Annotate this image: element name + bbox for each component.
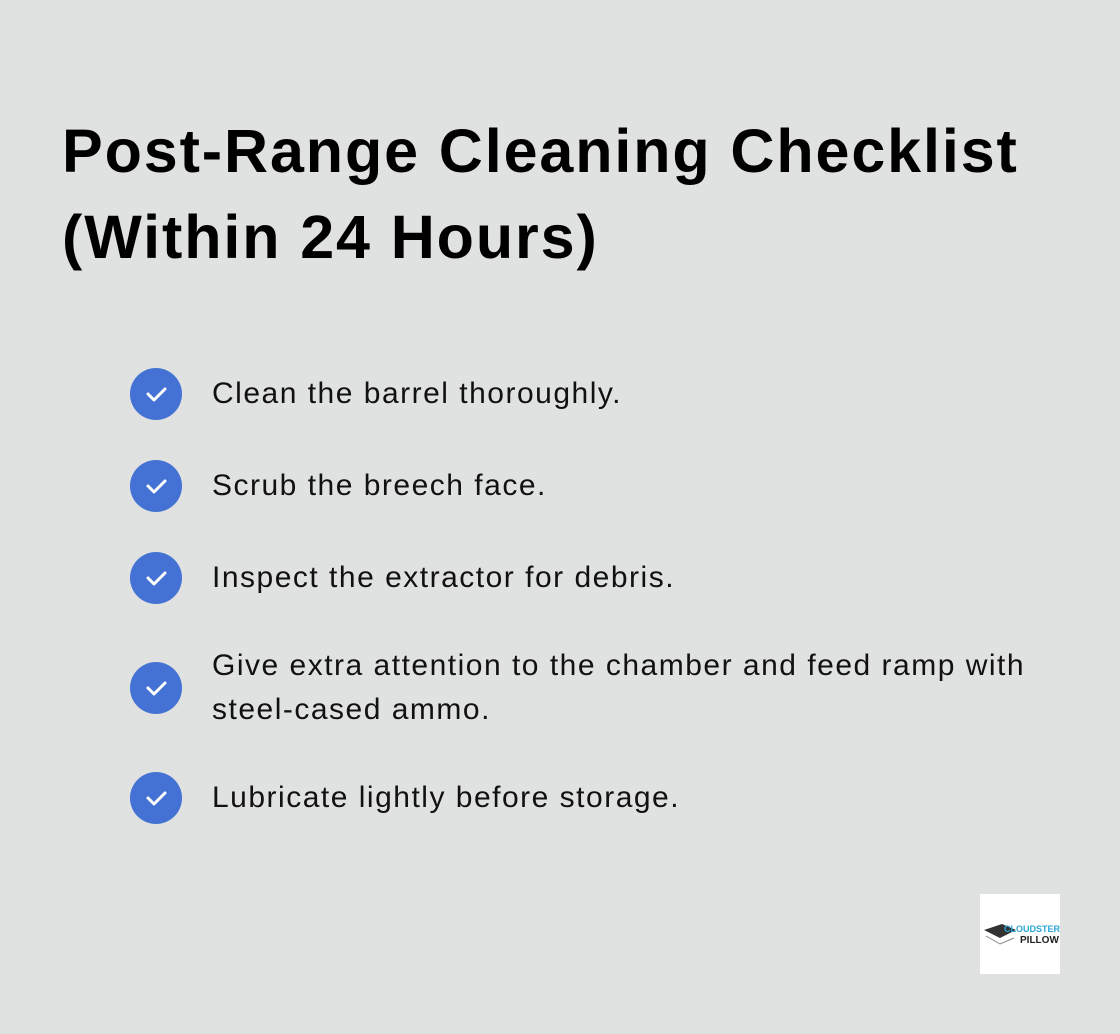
checklist item 4 bbox=[130, 649, 1025, 726]
checklist item 3 bbox=[130, 552, 675, 604]
checklist item 1 bbox=[130, 368, 622, 420]
logo: PILLOW bbox=[1020, 935, 1059, 946]
checklist item 5: Lubricate lightly before storage. bbox=[212, 781, 680, 814]
checklist item 4: steel-cased ammo. bbox=[212, 693, 491, 726]
logo bbox=[980, 894, 1060, 974]
title bbox=[62, 117, 1019, 271]
title: (Within 24 Hours) bbox=[62, 203, 599, 271]
logo: CLOUDSTER bbox=[1004, 924, 1060, 934]
checklist item 4: Give extra attention to the chamber and feed ramp with bbox=[212, 649, 1025, 682]
icon: check bbox=[130, 662, 182, 714]
icon: check bbox=[130, 368, 182, 420]
checklist item 2: Scrub the breech face. bbox=[212, 469, 547, 502]
title: Post-Range Cleaning Checklist bbox=[62, 117, 1019, 185]
checklist item 3: Inspect the extractor for debris. bbox=[212, 561, 675, 594]
checklist item 2 bbox=[130, 460, 547, 512]
checklist item 5 bbox=[130, 772, 680, 824]
icon: check bbox=[130, 552, 182, 604]
icon: check bbox=[130, 460, 182, 512]
icon: check bbox=[130, 772, 182, 824]
checklist item 1: Clean the barrel thoroughly. bbox=[212, 377, 622, 410]
